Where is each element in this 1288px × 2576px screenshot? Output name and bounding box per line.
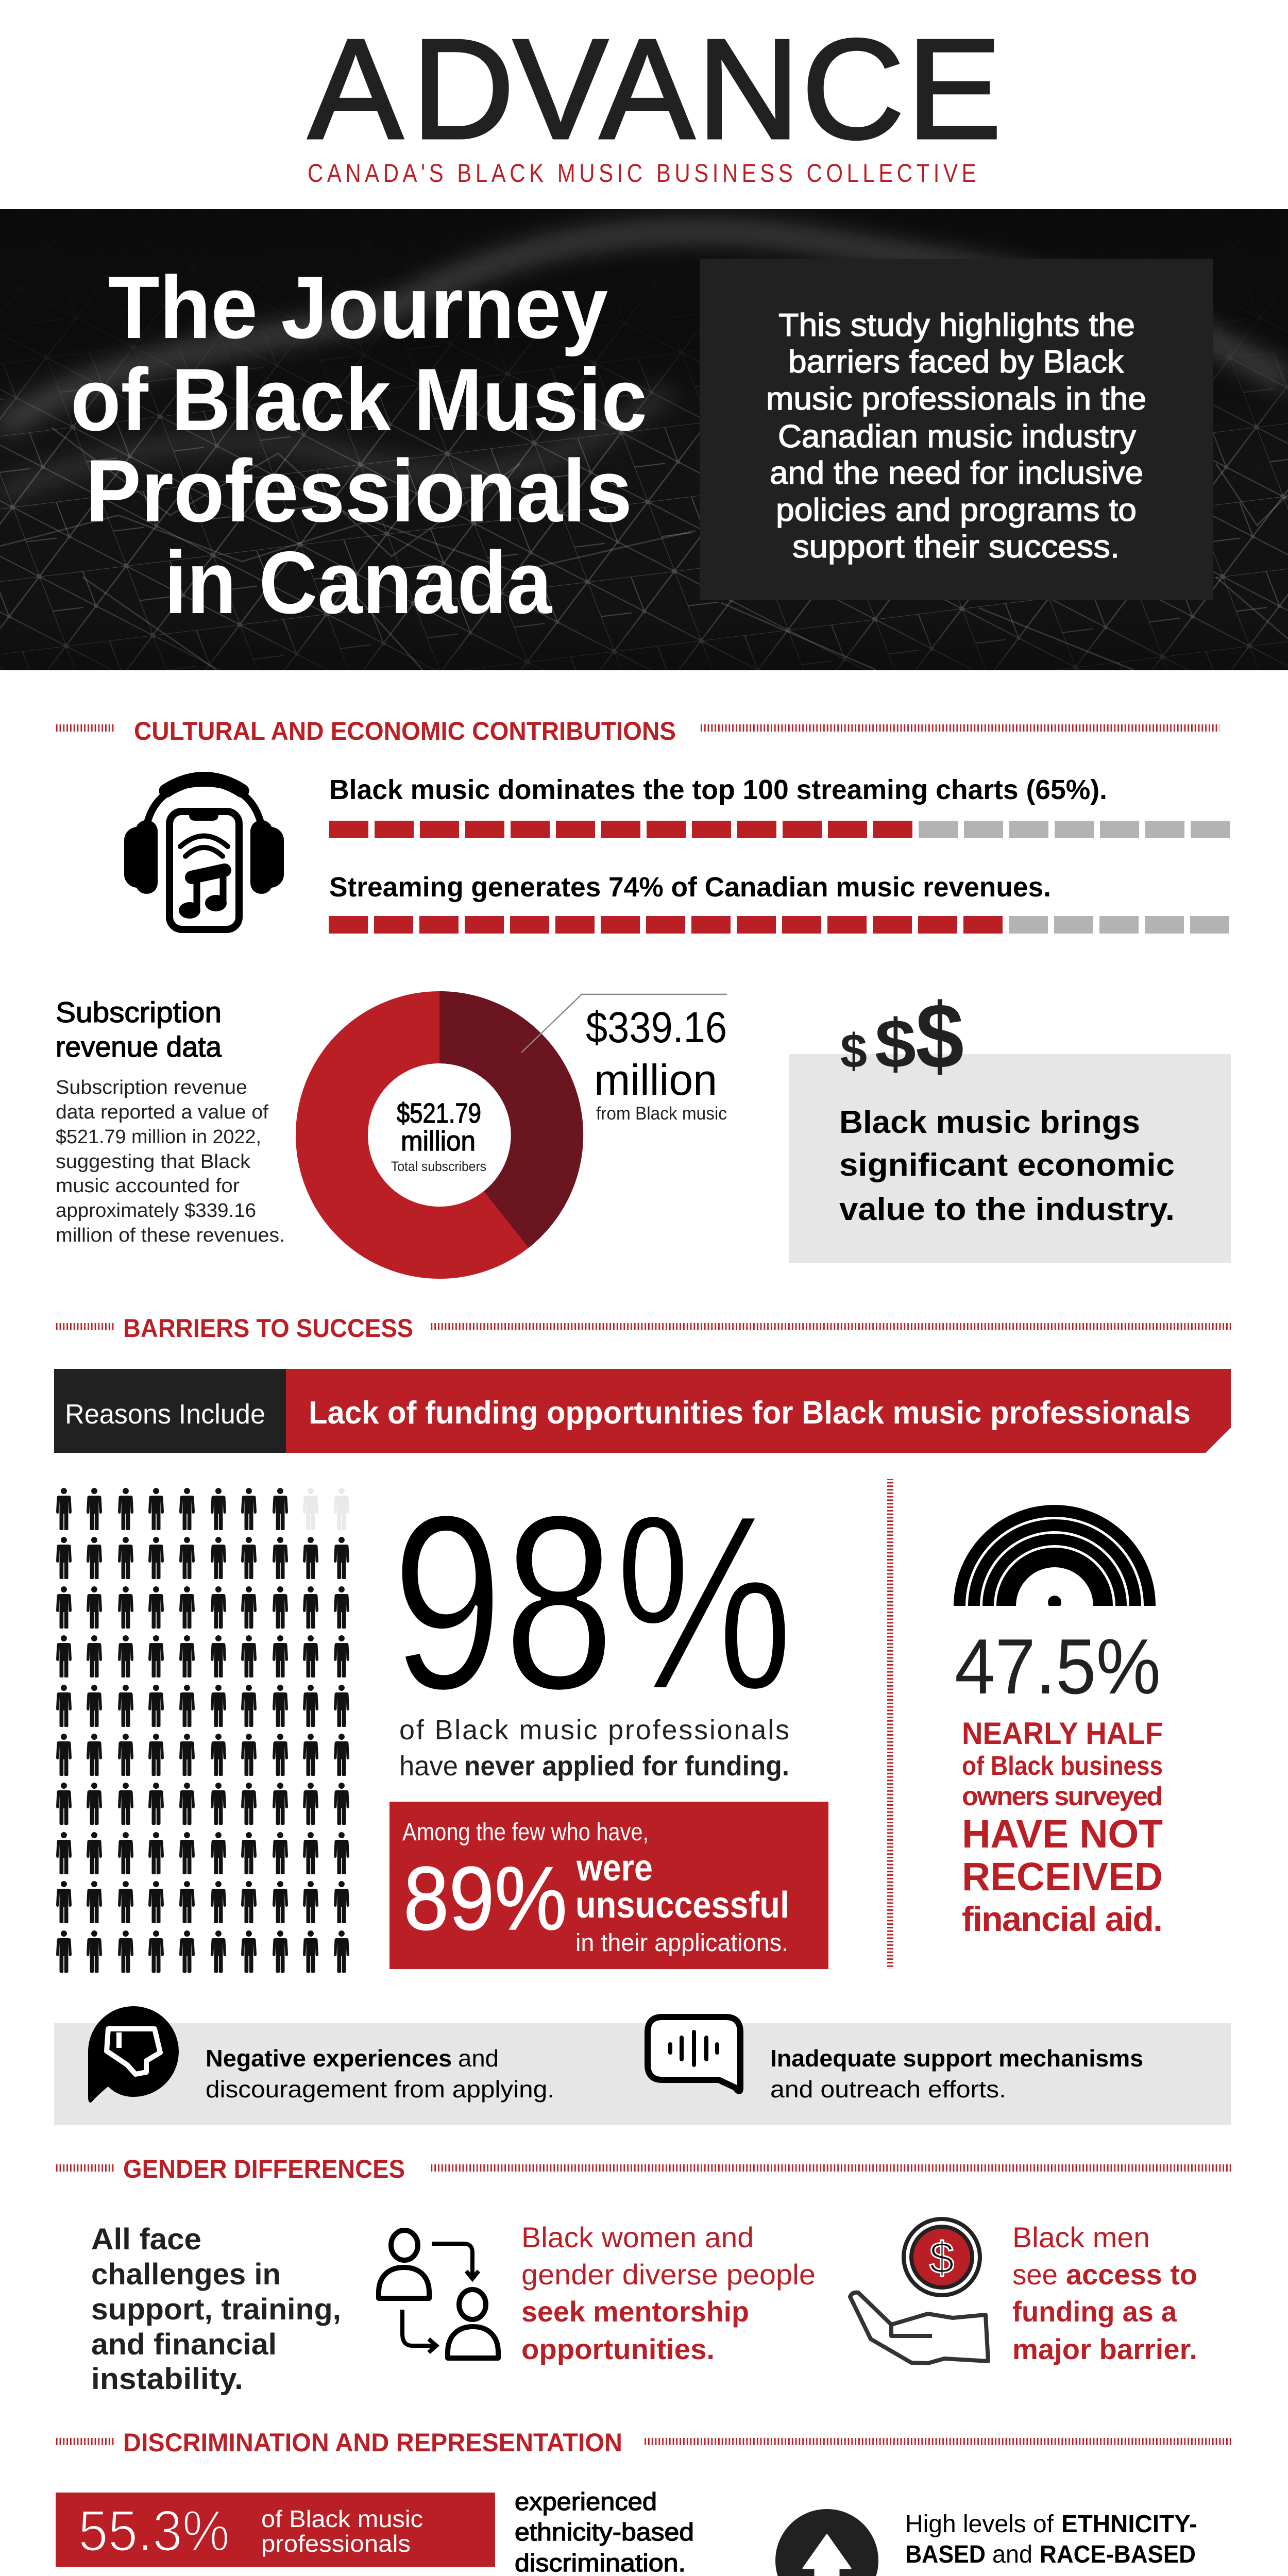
text: black men see access to funding: major barrier. (1012, 2333, 1197, 2365)
hero intro panel: policies and programs to (776, 493, 1137, 528)
text block: subscription revenue data: data reported a value of (56, 1101, 268, 1123)
icon: dollar signs: $ (875, 1006, 916, 1082)
text: negative experiences: and (458, 2045, 499, 2072)
text: all face challenges: All face (91, 2223, 201, 2256)
text: ethnicity and race based discrimination: RACE-BASED (1040, 2541, 1196, 2568)
donut centre label (391, 1098, 486, 1174)
text: ethnicity and race based discrimination (905, 2511, 1197, 2576)
callout: $339.16 million: from Black music (596, 1104, 727, 1124)
donut chart: subscription revenue (332, 991, 727, 1248)
leader line (521, 994, 727, 1053)
text: ethnicity-based discrimination: experienced (515, 2488, 657, 2516)
text: all face challenges: support, training, (91, 2293, 341, 2326)
stat: 47.5% have not received financial aid: RECEIVED (962, 1855, 1163, 1899)
text: negative experiences (206, 2045, 554, 2103)
icon: dollar signs: $ (840, 1024, 867, 1078)
donut centre label: $521.79 (397, 1098, 481, 1129)
text: negative experiences: Negative experiences (206, 2045, 452, 2072)
big stat: 98%: 98% (392, 1463, 793, 1742)
text: all face challenges: instability. (91, 2362, 243, 2396)
text: inadequate support: Inadequate support mechanisms (770, 2045, 1143, 2072)
stat panel: 55.3%: 55.3% (78, 2499, 230, 2563)
stat: black music on streaming charts: Black music dominates the top 100 streaming charts (65%). (329, 774, 1107, 805)
stat: streaming revenue: Streaming generates 74% of Canadian music revenues. (329, 872, 1051, 903)
panel: 89% unsuccessful (389, 1802, 828, 1969)
hero intro panel: This study highlights the (778, 308, 1135, 343)
progress squares 74% (329, 916, 1230, 934)
hero banner (0, 209, 1288, 670)
logo: ADVANCE: ADVANCE (308, 10, 1002, 168)
logo tagline: CANADA'S BLACK MUSIC BUSINESS COLLECTIVE (308, 159, 980, 188)
text: black men see access to funding (1012, 2221, 1197, 2365)
text: ethnicity-based discrimination: ethnicity-based (515, 2519, 694, 2546)
panel: 89% unsuccessful: 89% (403, 1849, 567, 1949)
text block: subscription revenue data: Subscription revenue (56, 1077, 247, 1098)
section heading: gender differences (54, 2155, 1231, 2183)
stat: 47.5% have not received financial aid (955, 1623, 1163, 1939)
icon: dollar signs: $ (916, 985, 964, 1088)
callout: $339.16 million: million (594, 1056, 717, 1104)
text: negative experiences: discouragement from applying. (206, 2076, 554, 2103)
text block: subscription revenue data: music accounted for (56, 1175, 240, 1197)
stat: 47.5% have not received financial aid: owners surveyed (962, 1782, 1163, 1811)
section heading: cultural and economic contributions (54, 717, 1219, 745)
text: ethnicity and race based discrimination: High levels of (905, 2511, 1054, 2538)
icon: mentorship people and arrows (379, 2230, 498, 2358)
text: ethnicity and race based discrimination: BASED (905, 2541, 986, 2568)
text: all face challenges: challenges in (91, 2258, 281, 2291)
stat: 47.5% have not received financial aid: financial aid. (962, 1900, 1163, 1939)
icon: coin above open hand: $ (929, 2233, 954, 2283)
panel: 89% unsuccessful: unsuccessful (575, 1885, 789, 1926)
callout: $339.16 million: $339.16 (586, 1003, 727, 1052)
text block: subscription revenue data: suggesting that Black (56, 1151, 251, 1173)
stat: 47.5% have not received financial aid: HAVE NOT (962, 1812, 1163, 1856)
panel: other barriers (54, 2006, 1231, 2125)
hero intro panel: support their success. (792, 529, 1120, 565)
section heading: discrimination and representation (54, 2428, 1231, 2457)
section heading: gender differences: GENDER DIFFERENCES (123, 2155, 405, 2183)
section heading: barriers to success (54, 1314, 1231, 1343)
progress squares 65% (329, 821, 1231, 838)
text: ethnicity and race based discrimination: ETHNICITY- (1061, 2511, 1197, 2538)
text block: subscription revenue data: approximately $339.16 (56, 1200, 256, 1222)
donut centre label: Total subscribers (391, 1159, 486, 1174)
text: black women and gender diverse people: opportunities. (521, 2333, 715, 2365)
donut centre label: million (401, 1126, 476, 1157)
stat panel: 55.3%: professionals (261, 2530, 411, 2557)
text: black men see access to funding: access to (1066, 2258, 1197, 2291)
panel: 89% unsuccessful: were (576, 1848, 653, 1889)
text: ethnicity-based discrimination (515, 2488, 694, 2576)
text: black men see access to funding: see (1012, 2258, 1058, 2291)
panel: 89% unsuccessful: in their applications. (575, 1929, 788, 1957)
icon: coin above open hand (850, 2217, 988, 2363)
icon: speech bubble with sound wave (648, 2017, 740, 2091)
icon: vinyl record (954, 1505, 1156, 1606)
pictogram: 98 of 100 people (56, 1488, 349, 1973)
callout: $339.16 million (586, 1003, 727, 1124)
icon: up arrow in circle (775, 2509, 878, 2576)
icon: headphones and phone with music note (124, 779, 284, 929)
hero intro panel (700, 259, 1213, 600)
banner: reasons include lack of funding (54, 1369, 1231, 1453)
hero intro panel: and the need for inclusive (770, 455, 1143, 491)
big stat: 98%: never applied for funding. (464, 1751, 789, 1782)
stat panel: 55.3% (56, 2493, 495, 2567)
banner: reasons include lack of funding: Reasons Include (65, 1399, 265, 1430)
stat: 47.5% have not received financial aid: 47.5% (955, 1623, 1161, 1710)
hero title: The Journey (108, 258, 608, 357)
icon: dollar signs (840, 985, 964, 1088)
text: black women and gender diverse people: seek mentorship (521, 2295, 749, 2328)
text block: subscription revenue data: revenue data (56, 1030, 222, 1063)
big stat: 98%: of Black music professionals (399, 1715, 789, 1745)
banner: reasons include lack of funding: Lack of funding opportunities for Black music professionals (309, 1395, 1191, 1431)
text: all face challenges (91, 2223, 341, 2396)
hero intro panel: Canadian music industry (778, 419, 1136, 454)
icon: thumbs down bubble (88, 2006, 179, 2103)
stat: 47.5% have not received financial aid: NEARLY HALF (962, 1716, 1163, 1751)
section heading: barriers to success: BARRIERS TO SUCCESS (123, 1314, 413, 1343)
stat panel: 55.3%: of Black music (261, 2505, 423, 2532)
text: black men see access to funding: funding as a (1012, 2295, 1177, 2328)
text block: subscription revenue data: Subscription (56, 996, 222, 1028)
text: black women and gender diverse people (521, 2221, 816, 2365)
text: black men see access to funding: Black men (1012, 2221, 1150, 2253)
hero intro panel: barriers faced by Black (788, 344, 1124, 380)
text: black women and gender diverse people: gender diverse people (521, 2258, 816, 2291)
panel: economic value: value to the industry. (839, 1192, 1175, 1227)
hero title: of Black Music (71, 350, 647, 449)
text: ethnicity and race based discrimination: and (992, 2541, 1032, 2568)
section heading: discrimination and representation: DISCRIMINATION AND REPRESENTATION (123, 2428, 622, 2457)
text: black women and gender diverse people: Black women and (521, 2221, 754, 2253)
hero intro panel: music professionals in the (766, 381, 1146, 417)
text: all face challenges: and financial (91, 2328, 277, 2361)
panel: economic value: significant economic (839, 1147, 1175, 1183)
panel: economic value (789, 985, 1231, 1263)
stat: 47.5% have not received financial aid: of Black business (962, 1751, 1163, 1781)
text: inadequate support (770, 2045, 1143, 2103)
hero title: in Canada (164, 533, 552, 632)
hero title: Professionals (86, 442, 632, 540)
section heading: cultural and economic contributions: CULTURAL AND ECONOMIC CONTRIBUTIONS (134, 717, 676, 745)
panel: economic value: Black music brings (839, 1105, 1140, 1140)
text: inadequate support: and outreach efforts. (770, 2076, 1006, 2103)
panel: 89% unsuccessful: Among the few who have, (402, 1819, 649, 1846)
big stat: 98%: have (399, 1751, 458, 1782)
hero title (71, 258, 647, 632)
text block: subscription revenue data (56, 996, 285, 1246)
text block: subscription revenue data: million of these revenues. (56, 1225, 285, 1246)
text block: subscription revenue data: $521.79 million in 2022, (56, 1126, 261, 1148)
